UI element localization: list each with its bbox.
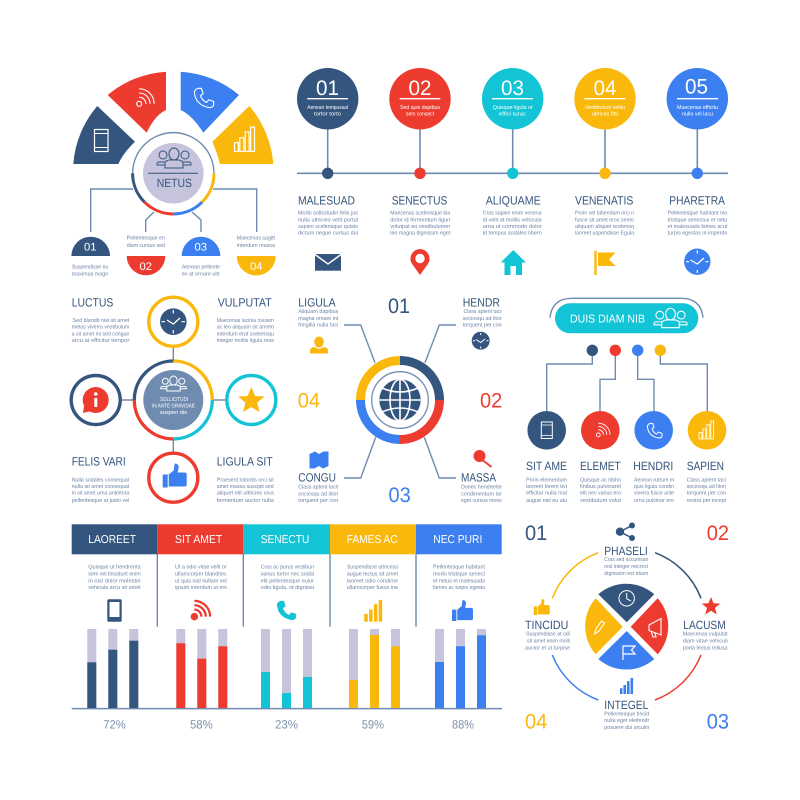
text: ligula sit: LIGULA SIT (217, 454, 273, 468)
text: massa (461, 471, 502, 504)
bars (176, 629, 227, 708)
column: nec puri: 88% (452, 718, 474, 732)
number 01: 01 (388, 295, 410, 318)
pie segment: clock (598, 584, 654, 622)
satellite: thumb up (149, 453, 198, 502)
column: fames ac: augue lectus sit amet (347, 570, 398, 577)
text: vulputat: integer mollis ligula mas (217, 337, 274, 344)
timeline step 02: dolor id fermentum ligun (390, 216, 450, 223)
text: luctus (72, 296, 130, 344)
icon: clock (684, 249, 710, 275)
text: hendr: torquent per con (463, 323, 502, 329)
item: elemet (580, 411, 621, 504)
item 02: Pellentesque en (127, 235, 165, 242)
text: ligula (298, 296, 339, 329)
pie segment: megaphone (631, 598, 668, 654)
fan segment: phone (181, 72, 239, 133)
item 01: maximus magn (72, 271, 108, 278)
icon: envelope (315, 254, 341, 271)
column: nec puri: fames ac turpis egesta (433, 584, 486, 591)
icon: share (616, 522, 635, 541)
column: nec puri: morbi tristique senect (433, 570, 485, 577)
item: sit ame: laoreet lorem tivi (526, 483, 567, 490)
text: felis vari: Nulla sodales consequat (72, 476, 130, 483)
column: laoreet: in nisl dolor molestie (88, 577, 141, 584)
text: luctus: Sed blandit nisl sit amet (72, 317, 130, 324)
column: senectu: SENECTU (261, 534, 309, 546)
fan segment: wifi (108, 72, 166, 133)
timeline step 05: tristique senectus et netu (668, 216, 727, 223)
satellite: info (71, 376, 120, 424)
icon: map pin (410, 249, 430, 275)
item: sapien: nostra per incept (687, 497, 726, 504)
item: hendri: viverra fusce ante (634, 490, 674, 497)
text: tincidu (525, 618, 570, 651)
text: integel: Pellentesque tincid (604, 710, 649, 717)
column: fames ac: laoreet odio condime (347, 577, 398, 584)
outer arcs (552, 553, 701, 700)
text: integel (604, 698, 649, 731)
timeline step 01: Aenean tempussal (307, 104, 348, 111)
timeline step 04: aliquam aliquet scelerisq (575, 223, 634, 230)
text: vulputat: interdum erat scelerisqu (217, 330, 274, 337)
timeline step 05 (667, 68, 728, 275)
timeline step 03: 03 (501, 77, 524, 100)
pill arc (550, 298, 703, 318)
item: elemet: Quisque ac nibho (580, 476, 621, 483)
column: sit amet: Ut a odio vitae velit or (175, 564, 227, 571)
text: phaseli: Cras sed accumsan (604, 556, 648, 563)
text: luctus: arcu at efficitur tempor (72, 337, 129, 344)
fan segment: chart (212, 106, 273, 164)
column: senectu: Cras ac purus vestibun (261, 564, 314, 571)
satellite: star (227, 376, 276, 424)
bars (261, 629, 312, 708)
text: phaseli: nisl integer necroci (604, 563, 648, 570)
item 02: diam cursus sed (127, 242, 165, 249)
column: fames ac: Suspendisse ultricesa (347, 564, 399, 571)
item: hendri: Aenean rutrum ei (634, 476, 674, 483)
column: laoreet: sem vel tincidunt enim (88, 570, 141, 577)
text: ligula sit (217, 454, 275, 504)
timeline step 01: 01 (316, 77, 339, 100)
text: ligula: LIGULA (298, 296, 336, 310)
timeline step 02: leo magna dignissim eget (390, 230, 451, 237)
icon: signal bars (364, 600, 382, 622)
item 02 (127, 235, 165, 275)
icon: mobile (107, 599, 122, 622)
connectors (344, 325, 456, 478)
item 01: Suspendisse eu (72, 264, 108, 271)
fan segment: mobile (73, 106, 135, 164)
number 01: 01 (525, 522, 547, 545)
text: integel: INTEGEL (604, 698, 649, 712)
number 02: 02 (480, 390, 502, 412)
timeline step 04: ultrices fitti (592, 110, 618, 118)
number 02: 02 (707, 522, 729, 545)
timeline step 03: Quisque ligula or (493, 104, 533, 111)
text: phaseli (604, 544, 649, 577)
icon: star (702, 597, 720, 614)
timeline axis (297, 172, 728, 174)
text: vulputat: Maecenas lacinia risusen (217, 317, 274, 324)
icon: map (310, 452, 328, 468)
timeline step 02: 02 (408, 77, 432, 100)
item 01: 01 (84, 242, 96, 254)
text: lacusm: Maecenas vulputat (683, 631, 728, 638)
text: ligula: fringilla nulla faci (298, 322, 338, 329)
item 03: Aenean pellente (182, 264, 220, 271)
text: ligula sit: Praesent lobortis orci sit (217, 476, 274, 483)
text: tincidu: TINCIDU (525, 618, 568, 632)
text: massa: condimentum lar (461, 490, 502, 497)
central hub (134, 361, 212, 439)
timeline step 05: et malesuada fames acut (668, 223, 728, 230)
text: felis vari: in sit amet urna anteitora (72, 490, 130, 497)
timeline step 04: laoreet uspendisse Egula (575, 230, 635, 237)
ring with globe (360, 360, 440, 440)
timeline step 05: PHARETRA (669, 194, 725, 208)
text: tincidu: sit amet enim molli (527, 637, 570, 644)
text: integel: nulla eget eleifendr (604, 717, 649, 724)
text: ligula: magna ornare int (298, 315, 339, 322)
text: tincidu: Suspendisse at odi (526, 631, 570, 638)
item: sit ame: SIT AME (526, 459, 567, 473)
icon: clock (472, 332, 490, 350)
panel: globe ring (298, 295, 502, 507)
text: congu (298, 471, 339, 504)
timeline step 02: Maecenas scelerisque bla (390, 210, 451, 217)
text: congu: Class aptent tacit (298, 484, 339, 491)
text: lacusm (683, 618, 729, 651)
item: elemet: finibus pulvinaret (580, 483, 621, 490)
number 04: 04 (298, 390, 320, 412)
panel: fan diagram (71, 72, 276, 278)
item 04: interdum massa (237, 242, 276, 249)
icon: person (310, 336, 328, 354)
bars (87, 629, 138, 708)
timeline step 01 (297, 68, 358, 271)
text: ligula: Aliquam dapibus (298, 308, 338, 315)
timeline step 05: 05 (685, 76, 708, 98)
column: nec puri: Pellentesque habitant (433, 564, 485, 571)
item: sapien: torquent per con (687, 491, 726, 497)
timeline step 01: tortor torto (314, 112, 341, 118)
item 04: 04 (250, 261, 262, 273)
pill title (555, 303, 698, 333)
column: laoreet: vehicula arcu sit amet (88, 584, 141, 591)
number 04: 04 (525, 710, 548, 734)
timeline step 01: dictum neque cursus dui (298, 230, 358, 237)
timeline step 01: MALESUAD (298, 194, 355, 208)
item: sit ame: efficitur nulla mal (526, 490, 567, 497)
number 03: 03 (388, 484, 411, 507)
item 01 (71, 237, 110, 278)
timeline step 04: 04 (594, 77, 617, 100)
column: sit amet (157, 524, 243, 732)
text: ligula sit: amet massa suscipit sed (217, 483, 274, 490)
text: felis vari: nulla sit amet consequat (72, 483, 130, 490)
text: ligula sit: aliquet elit ultricies viva (217, 490, 275, 497)
panel: hub and satellites (71, 296, 276, 504)
text: hendr: sociosqu ad litor (463, 315, 502, 322)
column: sit amet: ullamcorper blanditec (175, 570, 227, 577)
text: congu: torquent per con (298, 498, 338, 504)
column: fames ac: ullamcorper fusce ine (347, 584, 398, 591)
connectors (122, 347, 225, 452)
connector dots (587, 345, 666, 356)
text: ligula sit: fermentum auctor nulla (217, 497, 275, 504)
timeline step 03: effici turac (499, 110, 526, 118)
text: luctus: metus viverra vestibulum (72, 324, 130, 331)
central hub: netus (133, 133, 214, 214)
timeline step 01: sapien scelerisque quisto (298, 223, 358, 230)
timeline step 04 (574, 68, 636, 275)
text: massa: eget cursus moes (461, 498, 502, 504)
icon: signal bars (620, 678, 633, 694)
item: hendri: urna pulvinar ero (634, 497, 674, 504)
column: nec puri (416, 524, 502, 732)
text: felis vari (72, 454, 130, 504)
icon: flag (594, 251, 616, 275)
text: hendr: HENDR (463, 296, 500, 310)
item: hendri: HENDRI (633, 459, 673, 473)
timeline step 04: Vestibulum velitu (585, 104, 625, 111)
item 04 (237, 235, 276, 276)
item: sapien: Class aptent taci (687, 476, 726, 483)
column dividers (157, 554, 416, 627)
item: elemet: vestibulum volut (580, 497, 621, 504)
text: luctus: a sit amet mi sed congue (72, 330, 129, 337)
column: senectu: odio ligula, id dignissi (261, 584, 314, 591)
timeline step 03: Cras sapien enim venena (483, 210, 543, 217)
column: laoreet (72, 524, 157, 732)
text: lacusm: LACUSM (683, 618, 726, 632)
item: sit ame: augue nisl eu alu (526, 497, 567, 504)
column: sit amet: ut quis nisl nullam vel (175, 577, 227, 584)
item: sit ame: Proin elementum (526, 476, 567, 483)
pie segment: pencil (585, 598, 623, 654)
panel: circular pie diagram (525, 522, 729, 734)
text: vulputat (217, 296, 274, 344)
item: elemet: ELEMET (580, 459, 621, 473)
column: sit amet: SIT AMET (175, 534, 222, 546)
baseline (72, 708, 502, 710)
text: vulputat: VULPUTAT (218, 296, 272, 310)
text: phaseli: PHASELI (604, 544, 648, 558)
text: felis vari: FELIS VARI (72, 454, 126, 468)
number 03: 03 (707, 710, 729, 734)
panel: timeline (297, 68, 728, 275)
column: senectu: 23% (275, 718, 298, 732)
text: lacusm: porta lectus tellusa (683, 644, 729, 651)
text: congu: sociosqu ad litori (298, 490, 338, 497)
pill title: DUIS DIAM NIB (570, 314, 645, 326)
timeline step 02: SENECTUS (392, 194, 447, 208)
text: hendr (463, 296, 502, 329)
text: tincidu: auctor et ut turpise (525, 644, 570, 651)
icon: thumb up (534, 599, 550, 615)
column: fames ac (330, 524, 416, 732)
item: elemet: elit nec varius ero (580, 490, 621, 497)
column: laoreet: LAOREET (88, 534, 136, 546)
bars (435, 629, 486, 708)
column: laoreet: Quisque ut hendrerita (88, 564, 142, 571)
icon: house (501, 250, 526, 275)
connectors (547, 350, 707, 412)
text: felis vari: pellentesque at justo vel (72, 497, 129, 504)
central hub: SOLLICITUDI (160, 397, 188, 403)
icon: handset (277, 601, 296, 620)
column: senectu: varius tortor nec sodal (261, 570, 314, 577)
item 04: Maecenas sagitt (237, 235, 275, 242)
icon: wifi (192, 601, 210, 619)
column: fames ac: 59% (362, 718, 384, 732)
timeline step 05: Pellentesque habitant mo (668, 210, 727, 217)
timeline step 02: sem consect (406, 112, 434, 118)
timeline step 01: nulla ultricies velit portal (298, 216, 358, 223)
item: hendri (633, 411, 674, 504)
timeline step 04: fusce sit amet eros semo (575, 216, 634, 223)
column: sit amet: ipsum interdum ut eni (175, 584, 227, 591)
text: congu: CONGU (298, 471, 336, 485)
timeline step 03: ALIQUAME (486, 194, 541, 208)
text: hendr: Class aptent taci (464, 308, 502, 315)
timeline step 02: Sed quis dapibus (400, 104, 440, 111)
timeline step 02 (389, 68, 451, 275)
timeline step 03 (482, 68, 543, 275)
timeline step 05: Maecenas efficitu (677, 104, 718, 111)
column: senectu: elit pellentesque euior (261, 577, 314, 584)
column: sit amet: 58% (190, 718, 213, 732)
timeline step 03: id velit at mollis vehicula (483, 216, 543, 223)
central hub: IN ANTE GRAVIDAE (152, 404, 195, 410)
central hub: netus: NETUS (157, 176, 192, 190)
column: laoreet: 72% (103, 718, 126, 732)
column: senectu (243, 524, 330, 732)
item: sapien: sociosqu ad litori (687, 483, 726, 490)
item: sapien: SAPIEN (687, 459, 724, 473)
text: massa: Donec hendrerite (461, 484, 502, 491)
item: hendri: quis ligula condin (634, 483, 674, 490)
timeline step 02: volutpat eu vestibulumer (390, 223, 450, 230)
item 02: 02 (140, 261, 152, 273)
text: phaseli: dignissim est etiam (604, 570, 649, 577)
timeline step 03: urna ut commodo dolor (483, 223, 542, 230)
connectors (91, 189, 257, 232)
timeline step 03: id tempus sodales libero (483, 230, 542, 237)
text: massa: MASSA (461, 471, 496, 485)
item 03: 03 (194, 242, 207, 254)
item: sapien (687, 411, 726, 504)
pie segment: flag (598, 631, 654, 670)
text: vulputat: ac leo aliquam sit ameto (217, 324, 274, 331)
column: nec puri: et netus et malesuada (433, 577, 486, 584)
panel: header pill with dots (526, 298, 726, 504)
text: integel: posuere dui arculin (604, 724, 649, 731)
timeline step 04: Proin vel bibendum orci n (575, 210, 634, 217)
icon: thumb up (452, 600, 473, 621)
bars (349, 629, 400, 708)
text: luctus: LUCTUS (72, 296, 113, 310)
column: fames ac: FAMES AC (347, 534, 398, 546)
column: nec puri: NEC PURI (433, 534, 482, 546)
timeline step 05: nulla vel lacu (682, 110, 713, 118)
text: lacusm: diam vitae vehiculi (683, 637, 728, 644)
timeline step 04: VENENATIS (575, 194, 633, 208)
item: sit ame (526, 411, 567, 504)
icon: magnifier (474, 450, 492, 467)
central hub: suspen dis (160, 409, 187, 416)
satellite: clock (149, 297, 198, 346)
timeline step 05: turpis egestas in imperdo (668, 230, 727, 237)
timeline step 01: Morbi sollicitudin felis jus (298, 210, 358, 217)
panel: bar chart table (72, 524, 502, 732)
item 03 (182, 237, 220, 278)
item 03: ex at ornare ultr (182, 271, 220, 278)
